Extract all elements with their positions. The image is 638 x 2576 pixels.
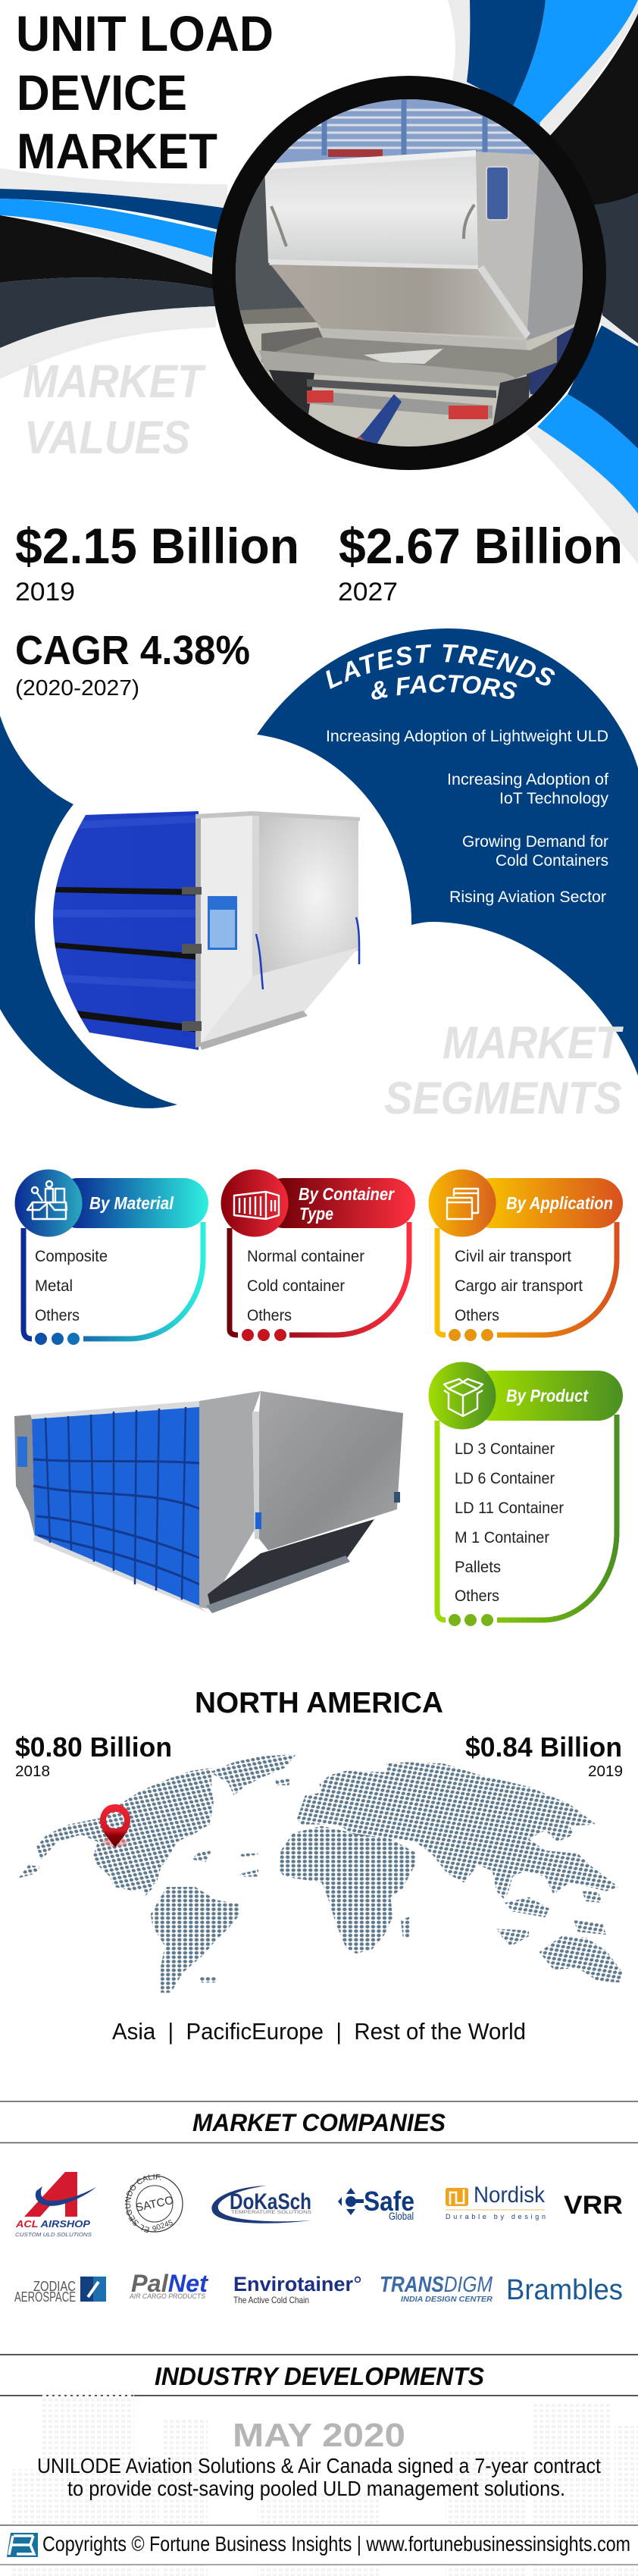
logo: Zodiac Aerospace: ZODIAC <box>33 2279 76 2294</box>
logo: DoKaSch <box>211 2186 312 2223</box>
logo: C-Safe Global: Safe <box>364 2186 414 2217</box>
trend list: Increasing Adoption of <box>447 771 608 788</box>
panel: by product: LD 6 Container <box>455 1470 555 1487</box>
market values ghost heading: MARKET <box>23 356 206 407</box>
CAGR: (2020-2027) <box>15 676 139 700</box>
panel: by material: Others <box>35 1307 80 1324</box>
curved heading: & FACTORS <box>371 675 517 700</box>
panel: by product: By Product <box>506 1386 589 1406</box>
regional value 2018 <box>15 1731 172 1780</box>
logo: TransDigm: TRANSDIGM <box>380 2273 493 2297</box>
logo: Zodiac Aerospace: AEROSPACE <box>14 2289 76 2305</box>
left blue blob <box>0 716 177 1108</box>
logo: DoKaSch: TEMPERATURE SOLUTIONS <box>231 2210 312 2215</box>
logo: SATCO stamp <box>124 2174 183 2234</box>
panel: by product: Pallets <box>455 1559 501 1576</box>
icon: open box <box>429 1362 496 1430</box>
development date: MAY 2020 <box>233 2417 405 2454</box>
panel: by container type: Others <box>247 1307 292 1324</box>
faint skyline background <box>10 2394 638 2576</box>
curved heading: LATEST TRENDS <box>326 644 555 689</box>
regional value 2019: $0.84 Billion <box>465 1731 622 1763</box>
panel: by application: Civil air transport <box>455 1248 571 1265</box>
regional value 2019: 2019 <box>588 1763 623 1780</box>
logo: Envirotainer: The Active Cold Chain <box>233 2295 309 2305</box>
title: DEVICE <box>17 64 187 121</box>
panel: by application <box>429 1169 623 1341</box>
market value 2027: $2.67 Billion <box>339 518 623 574</box>
market segments ghost heading: SEGMENTS <box>384 1073 622 1123</box>
trend list <box>326 728 608 906</box>
regional value 2019 <box>465 1731 623 1780</box>
panel: by material: By Material <box>89 1193 174 1213</box>
photo: ULD with blue net <box>14 1391 403 1613</box>
panel: by container type <box>221 1169 415 1341</box>
logo: ACL Airshop <box>15 2172 96 2238</box>
logo: PalNet: PalNet <box>131 2270 208 2297</box>
logo: TransDigm: INDIA DESIGN CENTER <box>401 2295 493 2304</box>
title: MARKET <box>17 123 217 179</box>
logo: Envirotainer <box>233 2273 360 2305</box>
logo: C-Safe Global <box>338 2186 414 2222</box>
development description: to provide cost-saving pooled ULD management solutions. <box>67 2477 565 2500</box>
logo: ACL Airshop: ACL AIRSHOP <box>15 2218 90 2230</box>
trend list: Rising Aviation Sector <box>449 888 606 906</box>
logo: ACL Airshop: CUSTOM ULD SOLUTIONS <box>15 2231 92 2238</box>
logo: Nordisk: Durable by design <box>446 2213 546 2220</box>
header background swooshes <box>0 0 638 564</box>
icon: Fortune Business Insights logo <box>7 2533 38 2557</box>
icon: map pin on North America <box>100 1804 130 1847</box>
photo: ULD with blue cover <box>45 811 360 1054</box>
market values ghost heading <box>23 356 206 463</box>
CAGR <box>15 628 250 700</box>
logo: C-Safe Global: Global <box>389 2210 414 2222</box>
logo: SATCO stamp: EL SEGUNDO CALIF. <box>124 2174 161 2233</box>
regional section heading: NORTH AMERICA <box>195 1687 443 1719</box>
panel: by product: LD 11 Container <box>455 1500 564 1517</box>
logo: VRR: VRR <box>564 2191 623 2220</box>
logo: Envirotainer: Envirotainer <box>233 2273 353 2296</box>
logo: Zodiac Aerospace <box>14 2277 106 2305</box>
market value 2027: 2027 <box>338 578 398 606</box>
panel: by product: LD 3 Container <box>455 1440 555 1458</box>
market segments ghost heading <box>384 1017 624 1123</box>
market value 2019: 2019 <box>15 578 75 606</box>
trend list: Growing Demand for <box>462 833 608 851</box>
panel: by application: Cargo air transport <box>455 1277 583 1295</box>
development description <box>37 2454 601 2500</box>
dotted world map <box>18 1754 623 1993</box>
panel: by material <box>15 1169 208 1345</box>
logo: PalNet: AIR CARGO PRODUCTS <box>129 2292 206 2301</box>
regional value 2018: 2018 <box>15 1763 50 1780</box>
market companies heading: MARKET COMPANIES <box>192 2109 446 2136</box>
panel: by application: Others <box>455 1307 499 1324</box>
icon: tools in box <box>15 1169 82 1237</box>
trend list: IoT Technology <box>499 790 608 807</box>
market value 2027 <box>338 518 623 606</box>
panel: by material: Metal <box>35 1277 73 1295</box>
panel: by product: M 1 Container <box>455 1529 549 1547</box>
footer <box>0 2526 638 2565</box>
market values ghost heading: VALUES <box>24 412 190 463</box>
market segments ghost heading: MARKET <box>443 1017 624 1068</box>
other regions legend: Asia | PacificEurope | Rest of the World <box>112 2018 526 2045</box>
logo: Nordisk: Nordisk <box>474 2183 546 2208</box>
title <box>16 5 274 179</box>
title: UNIT LOAD <box>16 5 274 61</box>
panel: by product: Others <box>455 1587 499 1605</box>
panel: latest trends and factors <box>257 628 638 1076</box>
market value 2019 <box>15 518 299 606</box>
panel: by container type: Cold container <box>247 1277 345 1295</box>
logo: SATCO stamp: SATCO <box>135 2194 175 2214</box>
logo: DoKaSch: DoKaSch <box>230 2189 311 2214</box>
industry developments heading: INDUSTRY DEVELOPMENTS <box>155 2362 484 2390</box>
trend list: Cold Containers <box>496 852 608 870</box>
circular photo: ULD on dolly <box>212 76 606 470</box>
market value 2019: $2.15 Billion <box>15 518 299 574</box>
icon: shipping container <box>221 1169 288 1237</box>
panel: by application: By Application <box>506 1193 613 1213</box>
icon: browser windows <box>429 1169 496 1237</box>
panel: by container type: By Container <box>299 1184 395 1204</box>
panel: by container type: Type <box>299 1204 333 1224</box>
logo: SATCO stamp: 90245 <box>152 2219 174 2234</box>
panel: by product <box>429 1362 623 1626</box>
dolly undercarriage <box>259 326 587 447</box>
regional value 2018: $0.80 Billion <box>15 1731 172 1763</box>
CAGR: CAGR 4.38% <box>15 628 250 673</box>
panel: by container type: Normal container <box>247 1248 364 1265</box>
trend list: Increasing Adoption of Lightweight ULD <box>326 728 608 745</box>
logo: Nordisk <box>446 2183 546 2220</box>
logo: Brambles: Brambles <box>506 2274 623 2306</box>
panel: by material: Composite <box>35 1248 108 1265</box>
